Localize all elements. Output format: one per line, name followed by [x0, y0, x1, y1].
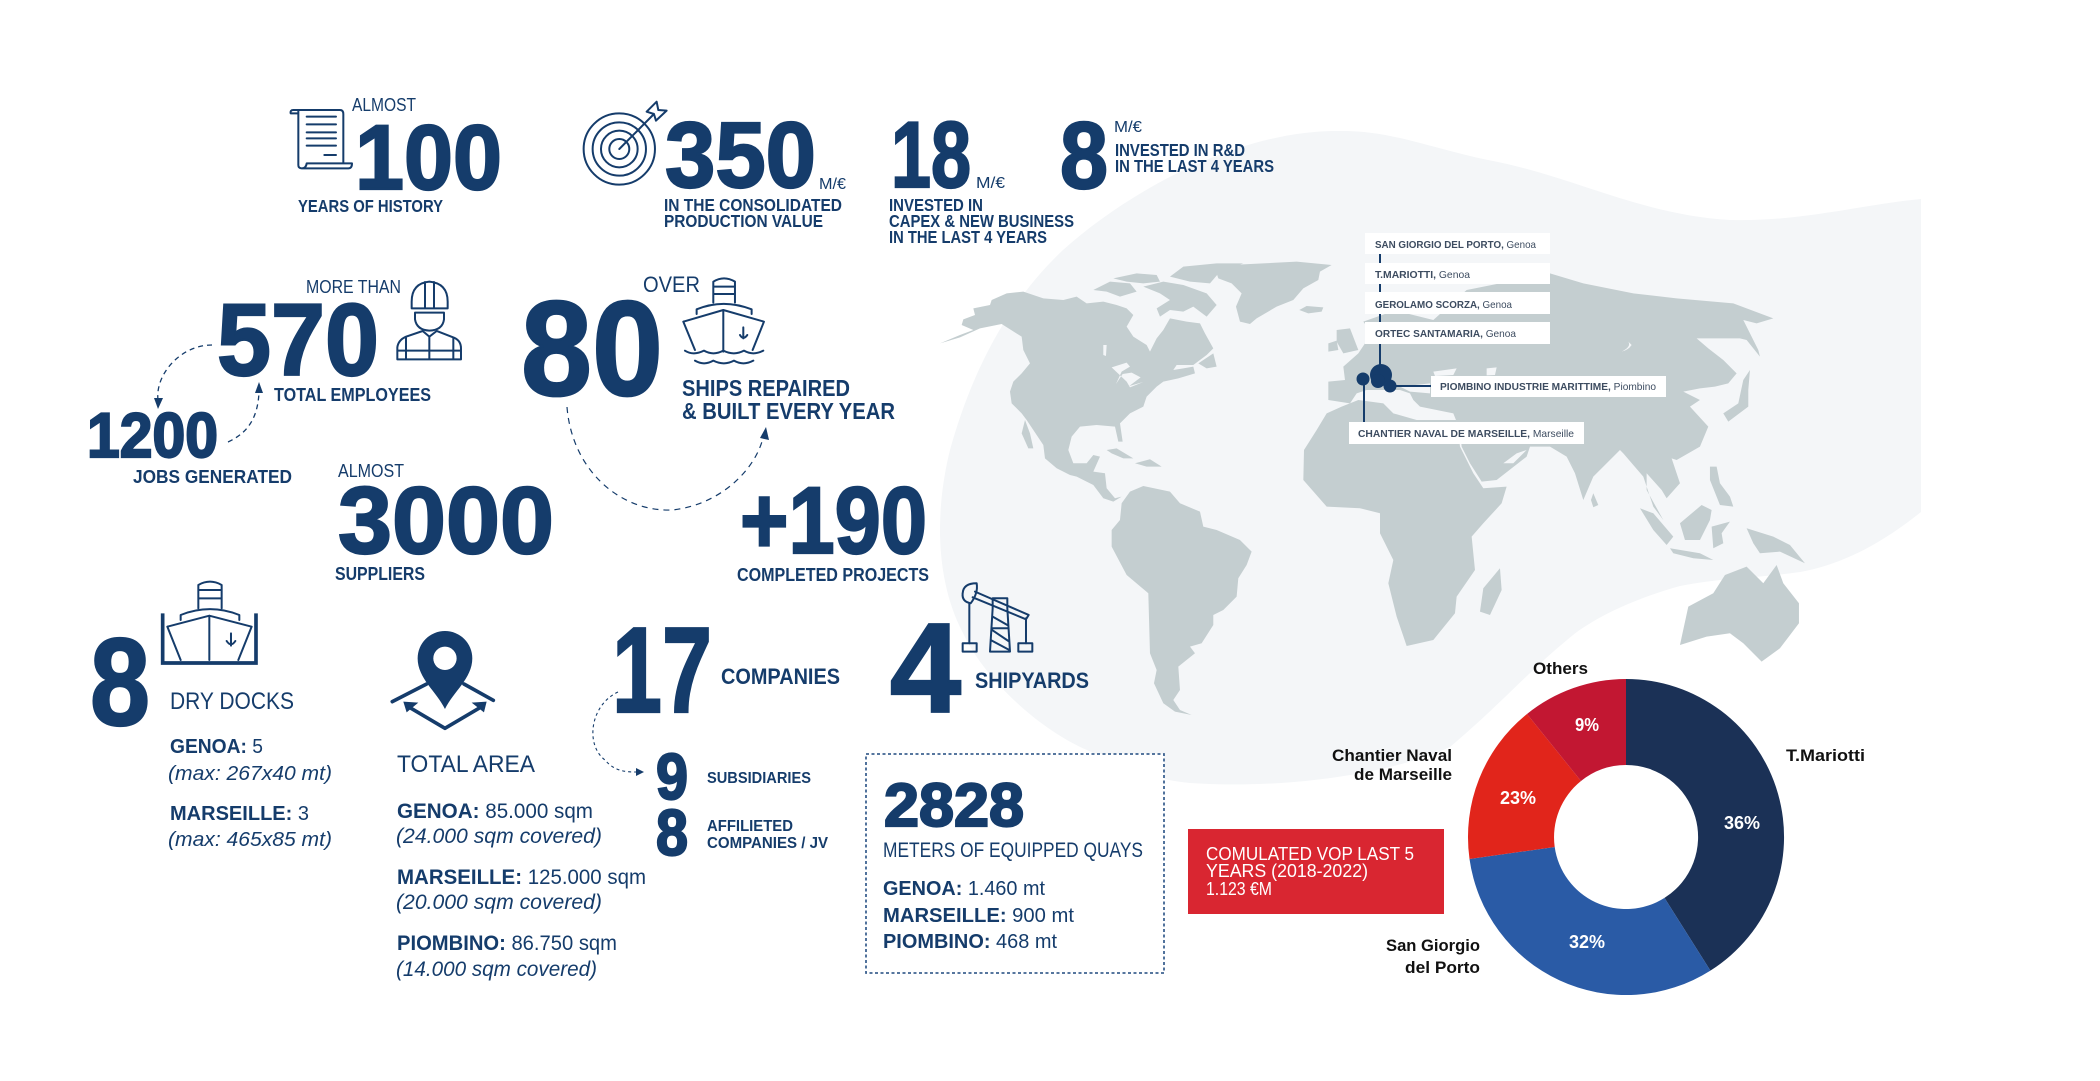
- donut chart: VOP by company: [1332, 659, 1865, 995]
- caption: & BUILT EVERY YEAR: [682, 398, 895, 424]
- number: 4: 4: [890, 597, 961, 739]
- caption: JOBS GENERATED: [133, 466, 292, 487]
- Genoa docks: (max: 267x40 mt): [168, 762, 332, 785]
- icon: ship in dock: [163, 582, 256, 663]
- label: almost: ALMOST: [352, 95, 416, 115]
- map label: Chantier Naval de Marseille: CHANTIER NAVAL DE MARSEILLE, Marseille: [1358, 428, 1574, 440]
- arrow: 1200 to 570: [228, 382, 263, 442]
- number: 9 subsidiaries: [656, 740, 811, 813]
- caption: SHIPYARDS: [975, 668, 1089, 693]
- Genoa area: [396, 800, 602, 848]
- Marseille docks: [168, 802, 332, 851]
- map label: Chantier Naval de Marseille: [1349, 422, 1584, 444]
- map label: Gerolamo Scorza: [1365, 292, 1550, 314]
- legend labels: de Marseille: [1354, 765, 1452, 784]
- stat: 570 employees: [217, 277, 461, 405]
- stat: total area: [392, 631, 646, 981]
- legend labels: [1332, 659, 1865, 977]
- caption: TOTAL EMPLOYEES: [274, 384, 431, 405]
- icon: target: [584, 102, 667, 185]
- number: 18: 18: [891, 102, 971, 207]
- number: 8 affiliated: AFFILIETED: [707, 818, 793, 835]
- callout: cumulated VOP: YEARS (2018-2022): [1206, 861, 1368, 881]
- Marseille area: (20.000 sqm covered): [396, 891, 602, 914]
- map label: Piombino: PIOMBINO INDUSTRIE MARITTIME, Piombino: [1440, 381, 1656, 393]
- background blob behind map: [940, 131, 1921, 784]
- number: 8 affiliated: [656, 796, 829, 869]
- stat: 1200 jobs generated: [87, 401, 292, 487]
- stat: 3000 suppliers: [335, 461, 554, 584]
- map label: San Giorgio del Porto: [1365, 233, 1550, 254]
- stat: 8 dry docks: [90, 582, 332, 851]
- caption: IN THE LAST 4 YEARS: [889, 227, 1047, 247]
- stat: 350 M/€ production value: [584, 102, 846, 231]
- caption: IN THE LAST 4 YEARS: [1115, 156, 1274, 176]
- caption: INVESTED IN: [889, 195, 983, 215]
- map label: Gerolamo Scorza: GEROLAMO SCORZA, Genoa: [1375, 299, 1512, 311]
- panel: equipped quays: [866, 754, 1164, 973]
- stat: 8 M/€ R&D: [1060, 103, 1274, 209]
- number: 8 affiliated: 8: [656, 796, 688, 869]
- unit: M/€: [976, 175, 1005, 192]
- caption: CAPEX & NEW BUSINESS: [889, 211, 1074, 231]
- Genoa area: (24.000 sqm covered): [396, 825, 602, 848]
- slice: Chantier Naval de Marseille: [1468, 714, 1581, 859]
- caption: COMPLETED PROJECTS: [737, 564, 929, 585]
- label: OVER: [643, 272, 700, 297]
- label: ALMOST: [338, 461, 404, 481]
- arrow: 17 to 9: [593, 692, 644, 776]
- percent labels: 36%: [1724, 813, 1760, 833]
- callout: cumulated VOP: 1.123 €M: [1206, 879, 1272, 899]
- number: 8 affiliated: COMPANIES / JV: [707, 835, 829, 852]
- caption: YEARS OF HISTORY: [298, 196, 443, 216]
- slice: T.Mariotti: [1626, 679, 1784, 971]
- stat: almost 100 years of history: [291, 95, 502, 216]
- number: 8: 8: [90, 614, 150, 752]
- stat: 80 ships: [521, 272, 895, 424]
- number: 80: 80: [521, 273, 663, 424]
- caption: METERS OF EQUIPPED QUAYS: [883, 839, 1143, 862]
- Marseille docks: MARSEILLE: 3: [170, 802, 309, 825]
- map label: T.Mariotti: [1365, 263, 1550, 284]
- Piombino area: (14.000 sqm covered): [396, 958, 597, 981]
- map label: San Giorgio del Porto: SAN GIORGIO DEL PORTO, Genoa: [1375, 239, 1536, 251]
- number: 9 subsidiaries: 9: [656, 740, 688, 813]
- map label: Piombino: [1431, 376, 1666, 397]
- number: 570: 570: [217, 283, 379, 397]
- callout: cumulated VOP: [1188, 829, 1444, 914]
- caption: SHIPS REPAIRED: [682, 375, 850, 401]
- number: 3000: 3000: [338, 468, 554, 574]
- heading: TOTAL AREA: [397, 751, 535, 778]
- heading: DRY DOCKS: [170, 688, 294, 715]
- caption: PRODUCTION VALUE: [664, 211, 823, 231]
- caption: IN THE CONSOLIDATED: [664, 195, 842, 215]
- number: 350: 350: [665, 103, 816, 207]
- number: 1200: 1200: [87, 401, 218, 471]
- Piombino area: [396, 932, 617, 981]
- icon: crane pump: [963, 583, 1032, 652]
- percent labels: 32%: [1569, 932, 1605, 952]
- Piombino quay: PIOMBINO: 468 mt: [883, 930, 1057, 953]
- Marseille area: [396, 866, 646, 914]
- map label: Ortec Santamaria: ORTEC SANTAMARIA, Genoa: [1375, 328, 1516, 340]
- number: 9 subsidiaries: SUBSIDIARIES: [707, 770, 811, 787]
- caption: INVESTED IN R&D: [1115, 140, 1245, 160]
- map label: T.Mariotti: T.MARIOTTI, Genoa: [1375, 269, 1470, 281]
- map location pins and connector lines: [1356, 254, 1431, 423]
- number: 8: 8: [1060, 103, 1108, 209]
- slice: San Giorgio del Porto: [1470, 847, 1710, 995]
- caption: [664, 195, 842, 231]
- unit: M/€: [819, 176, 846, 193]
- arrow: 80 to +190: [567, 407, 769, 510]
- icon: scroll: [291, 110, 352, 168]
- icon: map pin: [392, 631, 493, 728]
- map label: Ortec Santamaria: [1365, 322, 1550, 344]
- arrow: 570 to 1200: [154, 345, 212, 409]
- caption: COMPANIES: [721, 664, 840, 689]
- stat: 17 companies: [593, 602, 840, 869]
- number: +190: +190: [740, 468, 927, 574]
- legend labels: del Porto: [1405, 958, 1480, 977]
- Genoa docks: GENOA: 5: [170, 735, 263, 758]
- icon: ship: [683, 278, 764, 363]
- slice: Others: [1527, 679, 1626, 781]
- number: 17: 17: [612, 602, 712, 738]
- Genoa quay: GENOA: 1.460 mt: [883, 877, 1045, 900]
- legend labels: T.Mariotti: [1786, 746, 1865, 765]
- stat: 18 M/€ capex: [889, 102, 1074, 247]
- legend labels: Chantier Naval: [1332, 746, 1452, 765]
- stat: +190 completed projects: [737, 468, 929, 585]
- number: 100: 100: [355, 107, 502, 209]
- label: MORE THAN: [306, 277, 401, 297]
- icon: worker: [397, 282, 461, 359]
- stat: 4 shipyards: [890, 583, 1089, 739]
- Marseille quay: MARSEILLE: 900 mt: [883, 904, 1074, 927]
- unit: M/€: [1114, 119, 1142, 136]
- percent labels: [1500, 715, 1760, 952]
- number: 2828: 2828: [884, 771, 1024, 839]
- caption: [682, 375, 895, 424]
- legend labels: San Giorgio: [1386, 936, 1480, 955]
- legend labels: Others: [1533, 659, 1588, 678]
- Marseille docks: (max: 465x85 mt): [168, 828, 332, 851]
- percent labels: 9%: [1575, 715, 1599, 735]
- percent labels: 23%: [1500, 788, 1536, 808]
- caption: SUPPLIERS: [335, 564, 425, 584]
- Genoa docks: [168, 735, 332, 785]
- caption: [889, 195, 1074, 247]
- Piombino area: PIOMBINO: 86.750 sqm: [397, 932, 617, 955]
- world map: [940, 262, 1805, 715]
- caption: [1115, 140, 1274, 176]
- Genoa area: GENOA: 85.000 sqm: [397, 800, 593, 823]
- callout: cumulated VOP: COMULATED VOP LAST 5: [1206, 844, 1414, 864]
- Marseille area: MARSEILLE: 125.000 sqm: [397, 866, 646, 889]
